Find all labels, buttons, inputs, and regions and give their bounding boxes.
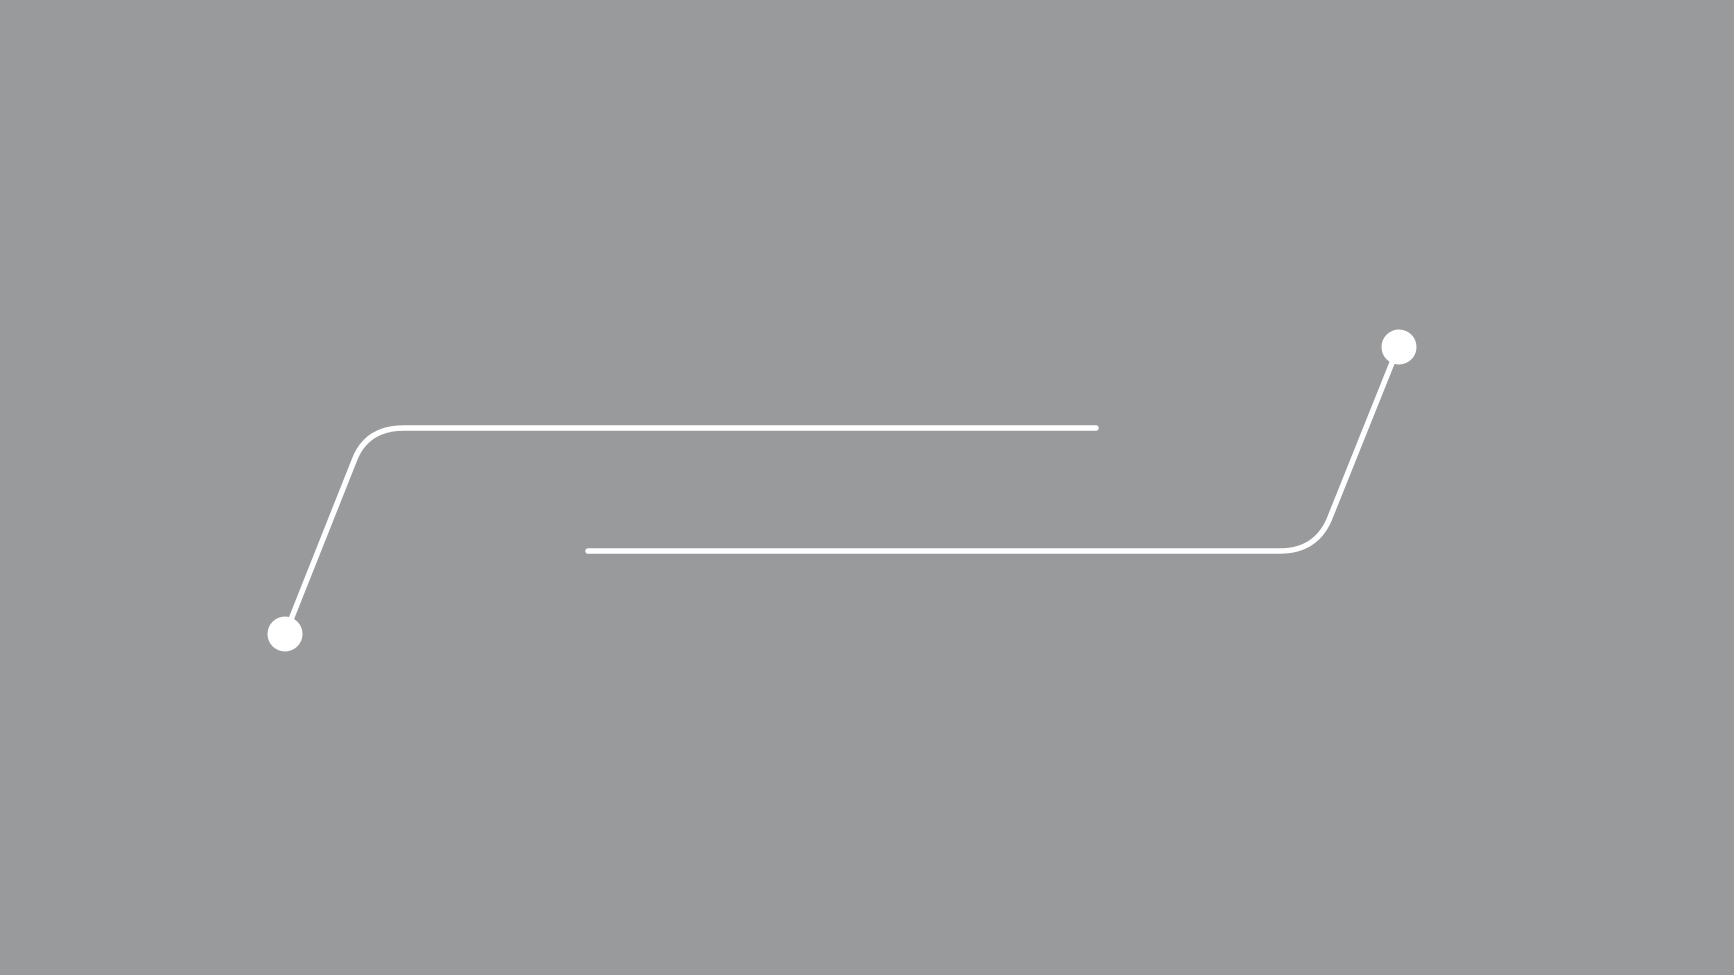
connector: upper left line with dot: [268, 428, 1096, 652]
connector: lower right line with dot: [588, 330, 1416, 551]
